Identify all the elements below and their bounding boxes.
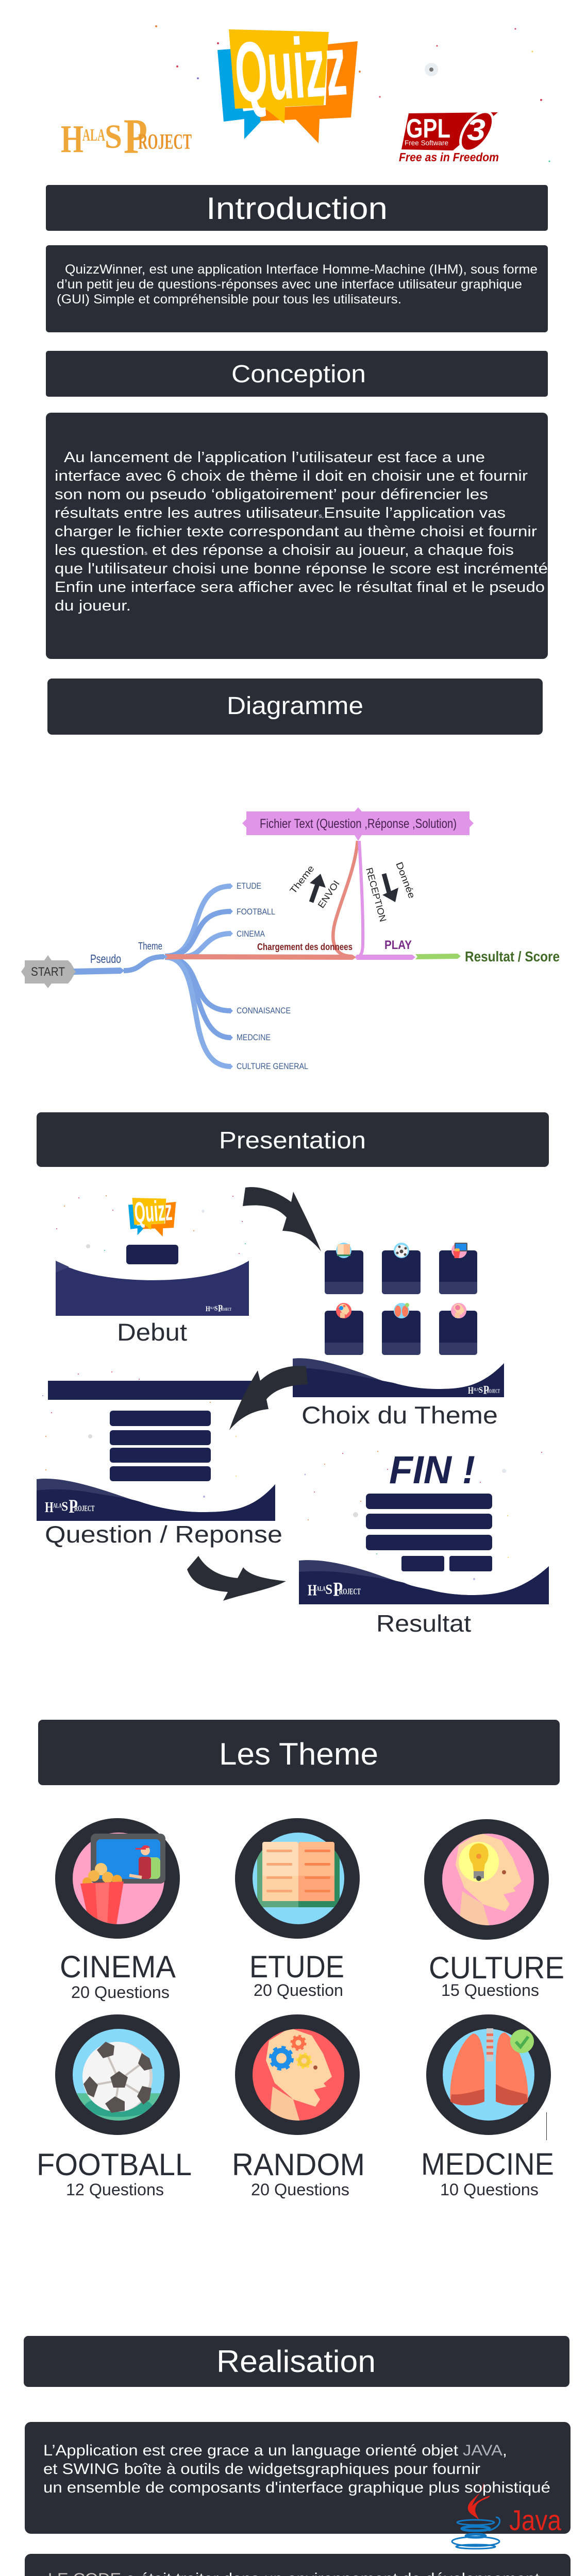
mini logo: Halas xyxy=(206,1303,231,1314)
panel: conception text: résultats entre les autres utilisateur s,Ensuite l’application vas xyxy=(55,505,506,521)
wave xyxy=(56,1261,249,1316)
mini logo: Halas: S xyxy=(325,1581,332,1597)
mini logo: Halas: H xyxy=(45,1499,54,1516)
labels: theme names: MEDCINE xyxy=(237,1032,271,1042)
arrow: Debut to Theme xyxy=(243,1187,321,1251)
mini logo: Quizz: Quizz xyxy=(133,1194,173,1229)
count: 20 Questions: 20 Questions xyxy=(71,1983,170,2002)
answer buttons xyxy=(110,1411,211,1481)
screen: Choix du Theme xyxy=(293,1243,504,1429)
logo: GPL v3: GPL xyxy=(406,114,450,144)
mini logo: Halas: ROJECT xyxy=(339,1586,361,1596)
label: MEDCINE: MEDCINE xyxy=(421,2147,554,2181)
trunk: resultat xyxy=(415,948,560,964)
logo: GPL v3: Free Software xyxy=(405,139,448,147)
logo: Quizz speech bubbles xyxy=(217,18,358,143)
node: START xyxy=(21,955,76,988)
mini logo: Halas: P xyxy=(218,1303,223,1314)
mini logo: Quizz xyxy=(128,1194,176,1236)
heading: Diagramme: Diagramme xyxy=(227,692,363,720)
labels: theme names xyxy=(237,881,308,1071)
panel: Java: un ensemble de composants d'interface graphique plus sophistiqué xyxy=(43,2479,550,2496)
screen: Debut xyxy=(56,1194,249,1346)
theme: Football xyxy=(37,2014,192,2199)
caption: Debut: Debut xyxy=(117,1318,187,1346)
logo: GPL v3: Free as in Freedom xyxy=(399,150,499,164)
logo: Quizz speech bubbles: Quizz xyxy=(232,18,349,120)
heading: Les Theme xyxy=(38,1720,560,1785)
logo: GPL v3: 3 xyxy=(467,113,485,147)
labels: theme names: FOOTBALL xyxy=(237,907,275,917)
main trunk: chargement: Chargement des donnees xyxy=(257,942,353,952)
mini logo: Halas: H xyxy=(308,1582,317,1599)
rotated labels: Donnée xyxy=(394,860,417,900)
icon: head with light bulb xyxy=(424,1819,549,1940)
panel: conception text: Enfin une interface sera afficher avec le résultat final et le pseudo xyxy=(55,579,545,596)
icon: soccer ball xyxy=(55,2014,180,2135)
caption: Resultat: Resultat xyxy=(376,1610,471,1637)
node: Fichier Text: Fichier Text (Question ,Réponse ,Solution) xyxy=(260,817,457,831)
logo: Halas Project xyxy=(61,109,192,164)
branch: Pseudo xyxy=(73,941,166,975)
mini logo: Halas xyxy=(468,1384,500,1397)
panel: introduction text: (GUI) Simple et compréhensible pour tous les utilisateurs. xyxy=(57,292,401,307)
icon: Java logo xyxy=(452,2482,562,2549)
chart: mind-map diagram xyxy=(21,807,560,1071)
heading: Presentation xyxy=(37,1112,549,1167)
mini icon: lungs xyxy=(394,1303,409,1318)
mini logo: Halas: ROJECT xyxy=(74,1504,95,1513)
heading: Realisation: Realisation xyxy=(216,2344,376,2379)
mini logo: Halas: P xyxy=(333,1579,343,1601)
labels: theme names: CINEMA xyxy=(237,929,265,939)
panel: conception text: du joueur. xyxy=(55,598,131,614)
branch: Pseudo: Theme xyxy=(138,941,162,952)
rotated labels xyxy=(288,860,417,923)
count: 12 Questions: 12 Questions xyxy=(66,2180,164,2199)
wave xyxy=(299,1560,549,1604)
mini icon: football xyxy=(394,1243,409,1258)
icon: lungs xyxy=(426,2014,551,2135)
panel: introduction text: d’un petit jeu de questions-réponses avec une interface utilisateur graphique xyxy=(57,277,522,292)
wave highlight xyxy=(56,1261,69,1273)
mini logo: Halas: ALA xyxy=(210,1307,214,1310)
mini logo: Halas: P xyxy=(69,1496,78,1517)
trunk: play: PLAY xyxy=(384,938,412,952)
screen: Question / Reponse xyxy=(37,1371,282,1548)
mini logo: Halas: H xyxy=(468,1385,474,1396)
panel: NetBeans xyxy=(25,2554,571,2576)
screen confetti xyxy=(56,1195,246,1254)
logo: Halas Project: ALA xyxy=(82,126,105,145)
branches: theme choices xyxy=(165,886,231,1066)
panel: introduction text: QuizzWinner, est une application Interface Homme-Machine (IHM), sous forme xyxy=(65,262,538,277)
logo: GPL v3 xyxy=(399,104,501,164)
theme cards xyxy=(325,1250,477,1355)
icon: open book xyxy=(235,1818,360,1939)
mini logo: Halas: ALA xyxy=(53,1502,62,1510)
icon: cinema popcorn xyxy=(55,1818,180,1939)
count: 10 Questions: 10 Questions xyxy=(440,2180,539,2199)
mini icon: book xyxy=(336,1243,351,1258)
arrow: envoi up xyxy=(310,874,326,902)
mini logo: Halas: S xyxy=(214,1304,217,1312)
mini logo: Halas xyxy=(308,1579,361,1601)
screen: Resultat xyxy=(299,1448,549,1637)
label: CINEMA: CINEMA xyxy=(60,1950,176,1984)
trunk: play xyxy=(356,841,415,960)
label: FOOTBALL: FOOTBALL xyxy=(37,2147,192,2182)
icon: head with gears xyxy=(235,2014,360,2135)
FIN text: FIN ! xyxy=(389,1448,475,1492)
logo: Halas Project: H xyxy=(61,117,83,161)
mini logo: Halas: S xyxy=(479,1386,483,1395)
heading: Conception xyxy=(46,351,548,397)
mini logo: Halas: P xyxy=(483,1384,489,1397)
node: START: START xyxy=(31,965,65,979)
label: ETUDE: ETUDE xyxy=(249,1950,344,1984)
main trunk: chargement xyxy=(165,841,358,960)
screen confetti xyxy=(42,1371,237,1498)
branch: Pseudo: Pseudo xyxy=(90,952,121,965)
heading: Conception: Conception xyxy=(231,361,366,388)
mini logo: Halas: ALA xyxy=(316,1585,326,1592)
caption: Choix du Theme: Choix du Theme xyxy=(301,1401,498,1429)
theme: Etude xyxy=(235,1818,360,1999)
panel: conception text: que l'utilisateur choisi une bonne réponse le score est incrémenté xyxy=(55,561,548,577)
panel: conception text: interface avec 6 choix de thème il doit en choisir une et fournir xyxy=(55,468,528,484)
labels: theme names: CULTURE GENERAL xyxy=(237,1061,308,1071)
arrow: Question to Resultat xyxy=(187,1556,286,1601)
mini logo: Halas xyxy=(45,1496,95,1517)
logo: Halas Project: S xyxy=(105,118,122,156)
heading: Presentation: Presentation xyxy=(219,1127,366,1154)
panel: Java xyxy=(25,2422,571,2549)
heading: Les Theme: Les Theme xyxy=(219,1737,378,1771)
rotated labels: RECEPTION xyxy=(364,867,388,923)
count: 20 Question: 20 Question xyxy=(254,1981,343,1999)
panel: introduction text xyxy=(46,245,548,332)
screen confetti xyxy=(304,1451,542,1580)
branch arrow tips xyxy=(230,883,233,1070)
theme: Cinema xyxy=(55,1818,180,2002)
labels: theme names: CONNAISANCE xyxy=(237,1006,291,1015)
panel: conception text: charger le fichier texte correspondant au thème choisi et fournir xyxy=(55,523,537,540)
node: Fichier Text xyxy=(242,807,474,841)
label: CULTURE: CULTURE xyxy=(429,1951,564,1985)
mini logo: Halas: H xyxy=(206,1305,210,1313)
heading: Introduction xyxy=(46,185,548,231)
heading: Introduction: Introduction xyxy=(206,191,388,226)
score rows xyxy=(366,1494,492,1571)
panel: conception text: Au lancement de l’application l’utilisateur est face a une xyxy=(64,449,485,466)
theme: Medcine xyxy=(421,2014,554,2199)
count: 15 Questions: 15 Questions xyxy=(441,1981,539,1999)
mini logo: Halas: ROJECT xyxy=(221,1307,231,1312)
confetti dots in header xyxy=(155,25,550,162)
mini logo: Halas: ALA xyxy=(473,1387,479,1392)
logo: Halas Project: ROJECT xyxy=(138,130,192,154)
rotated labels: ENVOI xyxy=(316,878,342,910)
wave xyxy=(293,1358,504,1397)
panel: Java: L’Application est cree grace a un language orienté objet JAVA, xyxy=(43,2442,507,2459)
theme: Culture xyxy=(424,1819,564,1999)
mini icon: brain head xyxy=(451,1303,466,1318)
mini icon: cinema xyxy=(451,1243,467,1258)
arrow: reception down xyxy=(382,874,398,902)
mini logo: Halas: ROJECT xyxy=(487,1389,500,1395)
start button xyxy=(126,1245,178,1264)
panel: conception text xyxy=(46,413,548,659)
mini icon: gears head xyxy=(336,1303,351,1318)
question bar xyxy=(48,1381,266,1400)
panel: conception text: son nom ou pseudo ‘obligatoirement’ pour défirencier les xyxy=(55,486,488,503)
mini logo: Halas: S xyxy=(61,1500,68,1514)
labels: theme names: ETUDE xyxy=(237,881,261,891)
panel: Java: et SWING boîte à outils de widgetsgraphiques pour fournir xyxy=(43,2461,480,2478)
rotated labels: Theme xyxy=(288,863,316,895)
caption: Question / Reponse: Question / Reponse xyxy=(45,1521,282,1548)
logo: Halas Project: P xyxy=(124,109,147,164)
panel: conception text: les question s et des réponse a choisir au joueur, a chaque fois xyxy=(55,542,514,558)
card footers xyxy=(325,1282,477,1355)
label: RANDOM: RANDOM xyxy=(232,2147,365,2182)
trunk: resultat: Resultat / Score xyxy=(465,948,560,964)
theme: Random xyxy=(232,2014,365,2199)
icon: Java logo: Java xyxy=(509,2504,562,2536)
heading: Diagramme xyxy=(47,679,543,735)
count: 20 Questions: 20 Questions xyxy=(251,2180,349,2199)
wave xyxy=(37,1479,275,1521)
heading: Realisation xyxy=(24,2336,569,2387)
arrow: Theme to Question xyxy=(229,1366,308,1430)
